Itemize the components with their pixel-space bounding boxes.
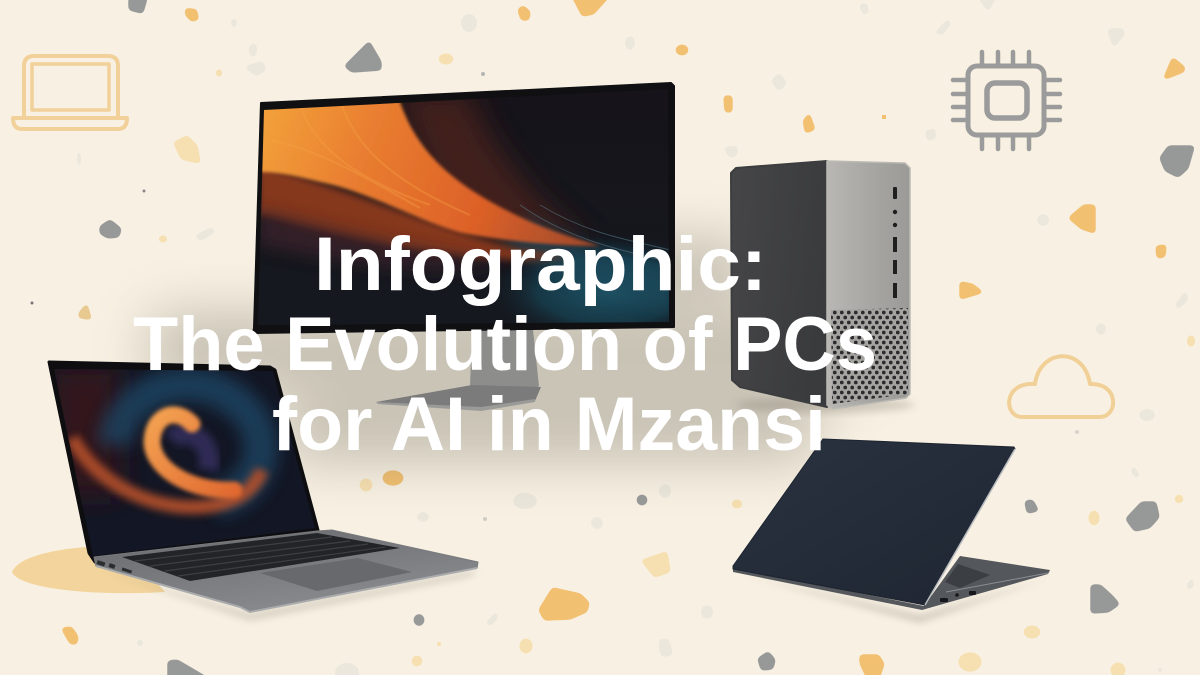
laptop side ports <box>97 560 132 573</box>
tower shadow <box>735 397 915 413</box>
monitor stand <box>376 330 541 411</box>
icon: microchip <box>953 52 1060 149</box>
rear laptop lid <box>733 439 1015 605</box>
title: The Evolution of PCs <box>133 302 877 387</box>
laptop base deck <box>94 530 478 612</box>
desktop tower PC <box>731 161 915 413</box>
laptop trackpad <box>260 558 412 591</box>
tower dark side panel <box>731 161 827 407</box>
desktop monitor <box>252 82 675 411</box>
icon: outline laptop <box>13 56 127 129</box>
laptop wallpaper swirl <box>54 369 315 556</box>
laptop closed-lid rear view <box>733 439 1050 622</box>
title: for AI in Mzansi <box>272 382 826 467</box>
title haze <box>150 240 860 460</box>
laptop front edge highlight <box>96 566 477 612</box>
rear laptop ports <box>940 591 976 602</box>
laptop screen bezel <box>49 362 318 562</box>
laptop soft shadow <box>100 570 478 620</box>
icon: cloud <box>1009 356 1113 417</box>
title <box>133 222 877 467</box>
monitor frame <box>253 83 674 333</box>
rear laptop shadow <box>740 574 1048 622</box>
title: Infographic: <box>314 222 767 307</box>
rear laptop base <box>733 556 1050 610</box>
laptop keyboard <box>122 533 400 581</box>
monitor screen wallpaper <box>258 90 669 325</box>
laptop shadow blob <box>12 546 165 593</box>
lid edge highlight <box>925 449 1015 605</box>
tower silver front panel <box>827 161 910 409</box>
tower ports <box>893 187 897 298</box>
tower vent grille <box>831 308 908 404</box>
laptop open, front view <box>12 360 478 620</box>
